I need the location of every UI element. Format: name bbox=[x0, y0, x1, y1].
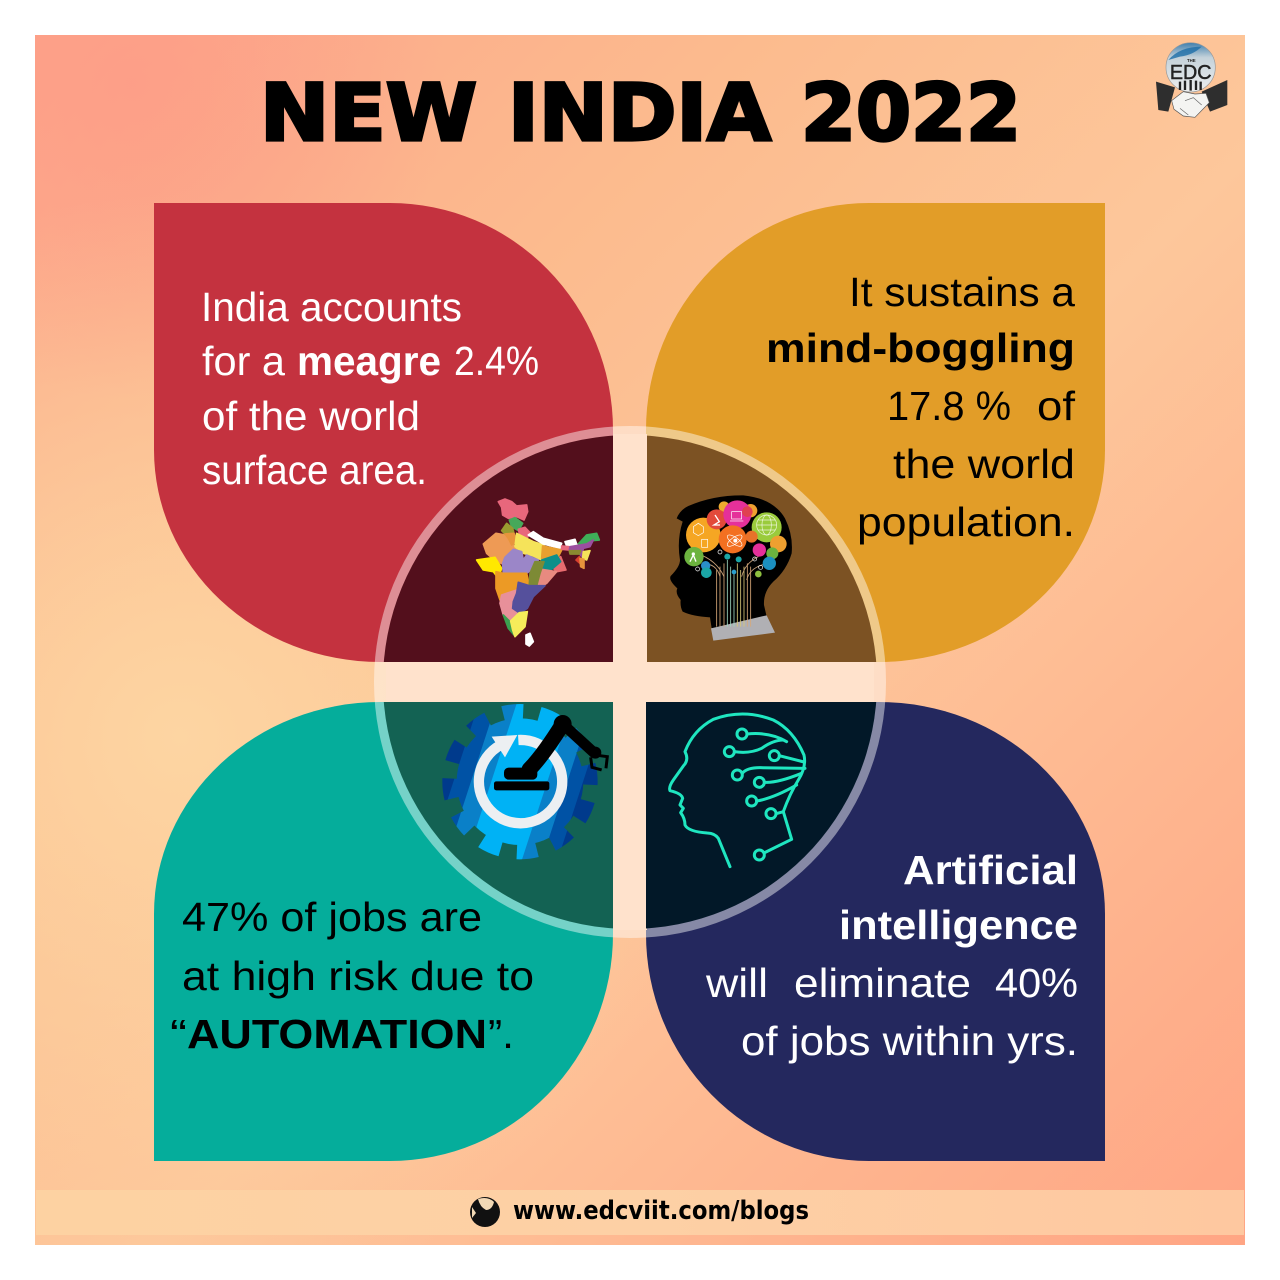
text: land area: 2.4% bbox=[454, 338, 539, 384]
icon: automation gear and robot arm bbox=[442, 704, 609, 860]
panel: artificial intelligence (navy) bbox=[646, 702, 1105, 1161]
text: artificial intelligence: of jobs within yrs. bbox=[741, 1018, 1078, 1064]
title: 2022 bbox=[801, 69, 1021, 159]
quadrant: dark green bbox=[384, 702, 613, 928]
title: INDIA bbox=[508, 69, 771, 159]
footer band bbox=[36, 1190, 1244, 1235]
text: automation: “ bbox=[170, 1011, 187, 1057]
text: population: It sustains a bbox=[849, 269, 1075, 315]
title: NEW bbox=[260, 69, 477, 159]
text: artificial intelligence: will bbox=[705, 960, 768, 1006]
panel: land area (red) bbox=[154, 203, 613, 662]
panel: automation (teal) bbox=[154, 702, 613, 1161]
text: population bbox=[766, 269, 1076, 545]
text: population: 17.8 % bbox=[887, 383, 1011, 429]
text: artificial intelligence: eliminate bbox=[794, 960, 971, 1006]
text: land area bbox=[201, 284, 539, 493]
quadrant: dark navy bbox=[646, 702, 876, 928]
logo: EDC globe and handshake: THE bbox=[1187, 58, 1196, 63]
text: artificial intelligence: intelligence bbox=[839, 902, 1078, 948]
title bbox=[260, 69, 1021, 159]
text: population: the world bbox=[893, 441, 1075, 487]
text: artificial intelligence: 40% bbox=[995, 960, 1078, 1006]
central translucent disc bbox=[374, 426, 886, 938]
text: land area: for a bbox=[202, 338, 285, 384]
text: artificial intelligence: Artificial bbox=[903, 847, 1078, 893]
text: land area: India accounts bbox=[201, 284, 462, 330]
text: automation: 47% of jobs are bbox=[182, 894, 482, 940]
logo: EDC globe and handshake bbox=[1156, 43, 1227, 117]
text: automation: AUTOMATION bbox=[187, 1011, 487, 1057]
text: artificial intelligence bbox=[705, 847, 1078, 1064]
text: land area: meagre bbox=[297, 338, 441, 384]
text: land area: surface area. bbox=[202, 447, 427, 493]
central cross bbox=[386, 434, 874, 930]
text: automation: at high risk due to bbox=[182, 953, 534, 999]
icon: head with colourful bubbles bbox=[670, 495, 792, 641]
footer website address: www.edcviit.com/blogs bbox=[513, 1196, 809, 1226]
text: population: mind-boggling bbox=[766, 325, 1075, 371]
text: automation: ”. bbox=[488, 1011, 514, 1057]
panel: population (amber) bbox=[646, 203, 1105, 662]
icon: India map bbox=[477, 499, 599, 646]
text: population: of bbox=[1037, 383, 1076, 429]
quadrant: dark red bbox=[384, 436, 613, 662]
text: population: population. bbox=[857, 499, 1075, 545]
icon: AI circuit head bbox=[670, 714, 805, 867]
text: automation bbox=[170, 894, 534, 1057]
text: land area: of the world bbox=[202, 393, 420, 439]
quadrant: dark brown bbox=[647, 436, 876, 662]
icon: globe bbox=[470, 1197, 500, 1227]
logo: EDC globe and handshake: EDC bbox=[1170, 61, 1212, 84]
